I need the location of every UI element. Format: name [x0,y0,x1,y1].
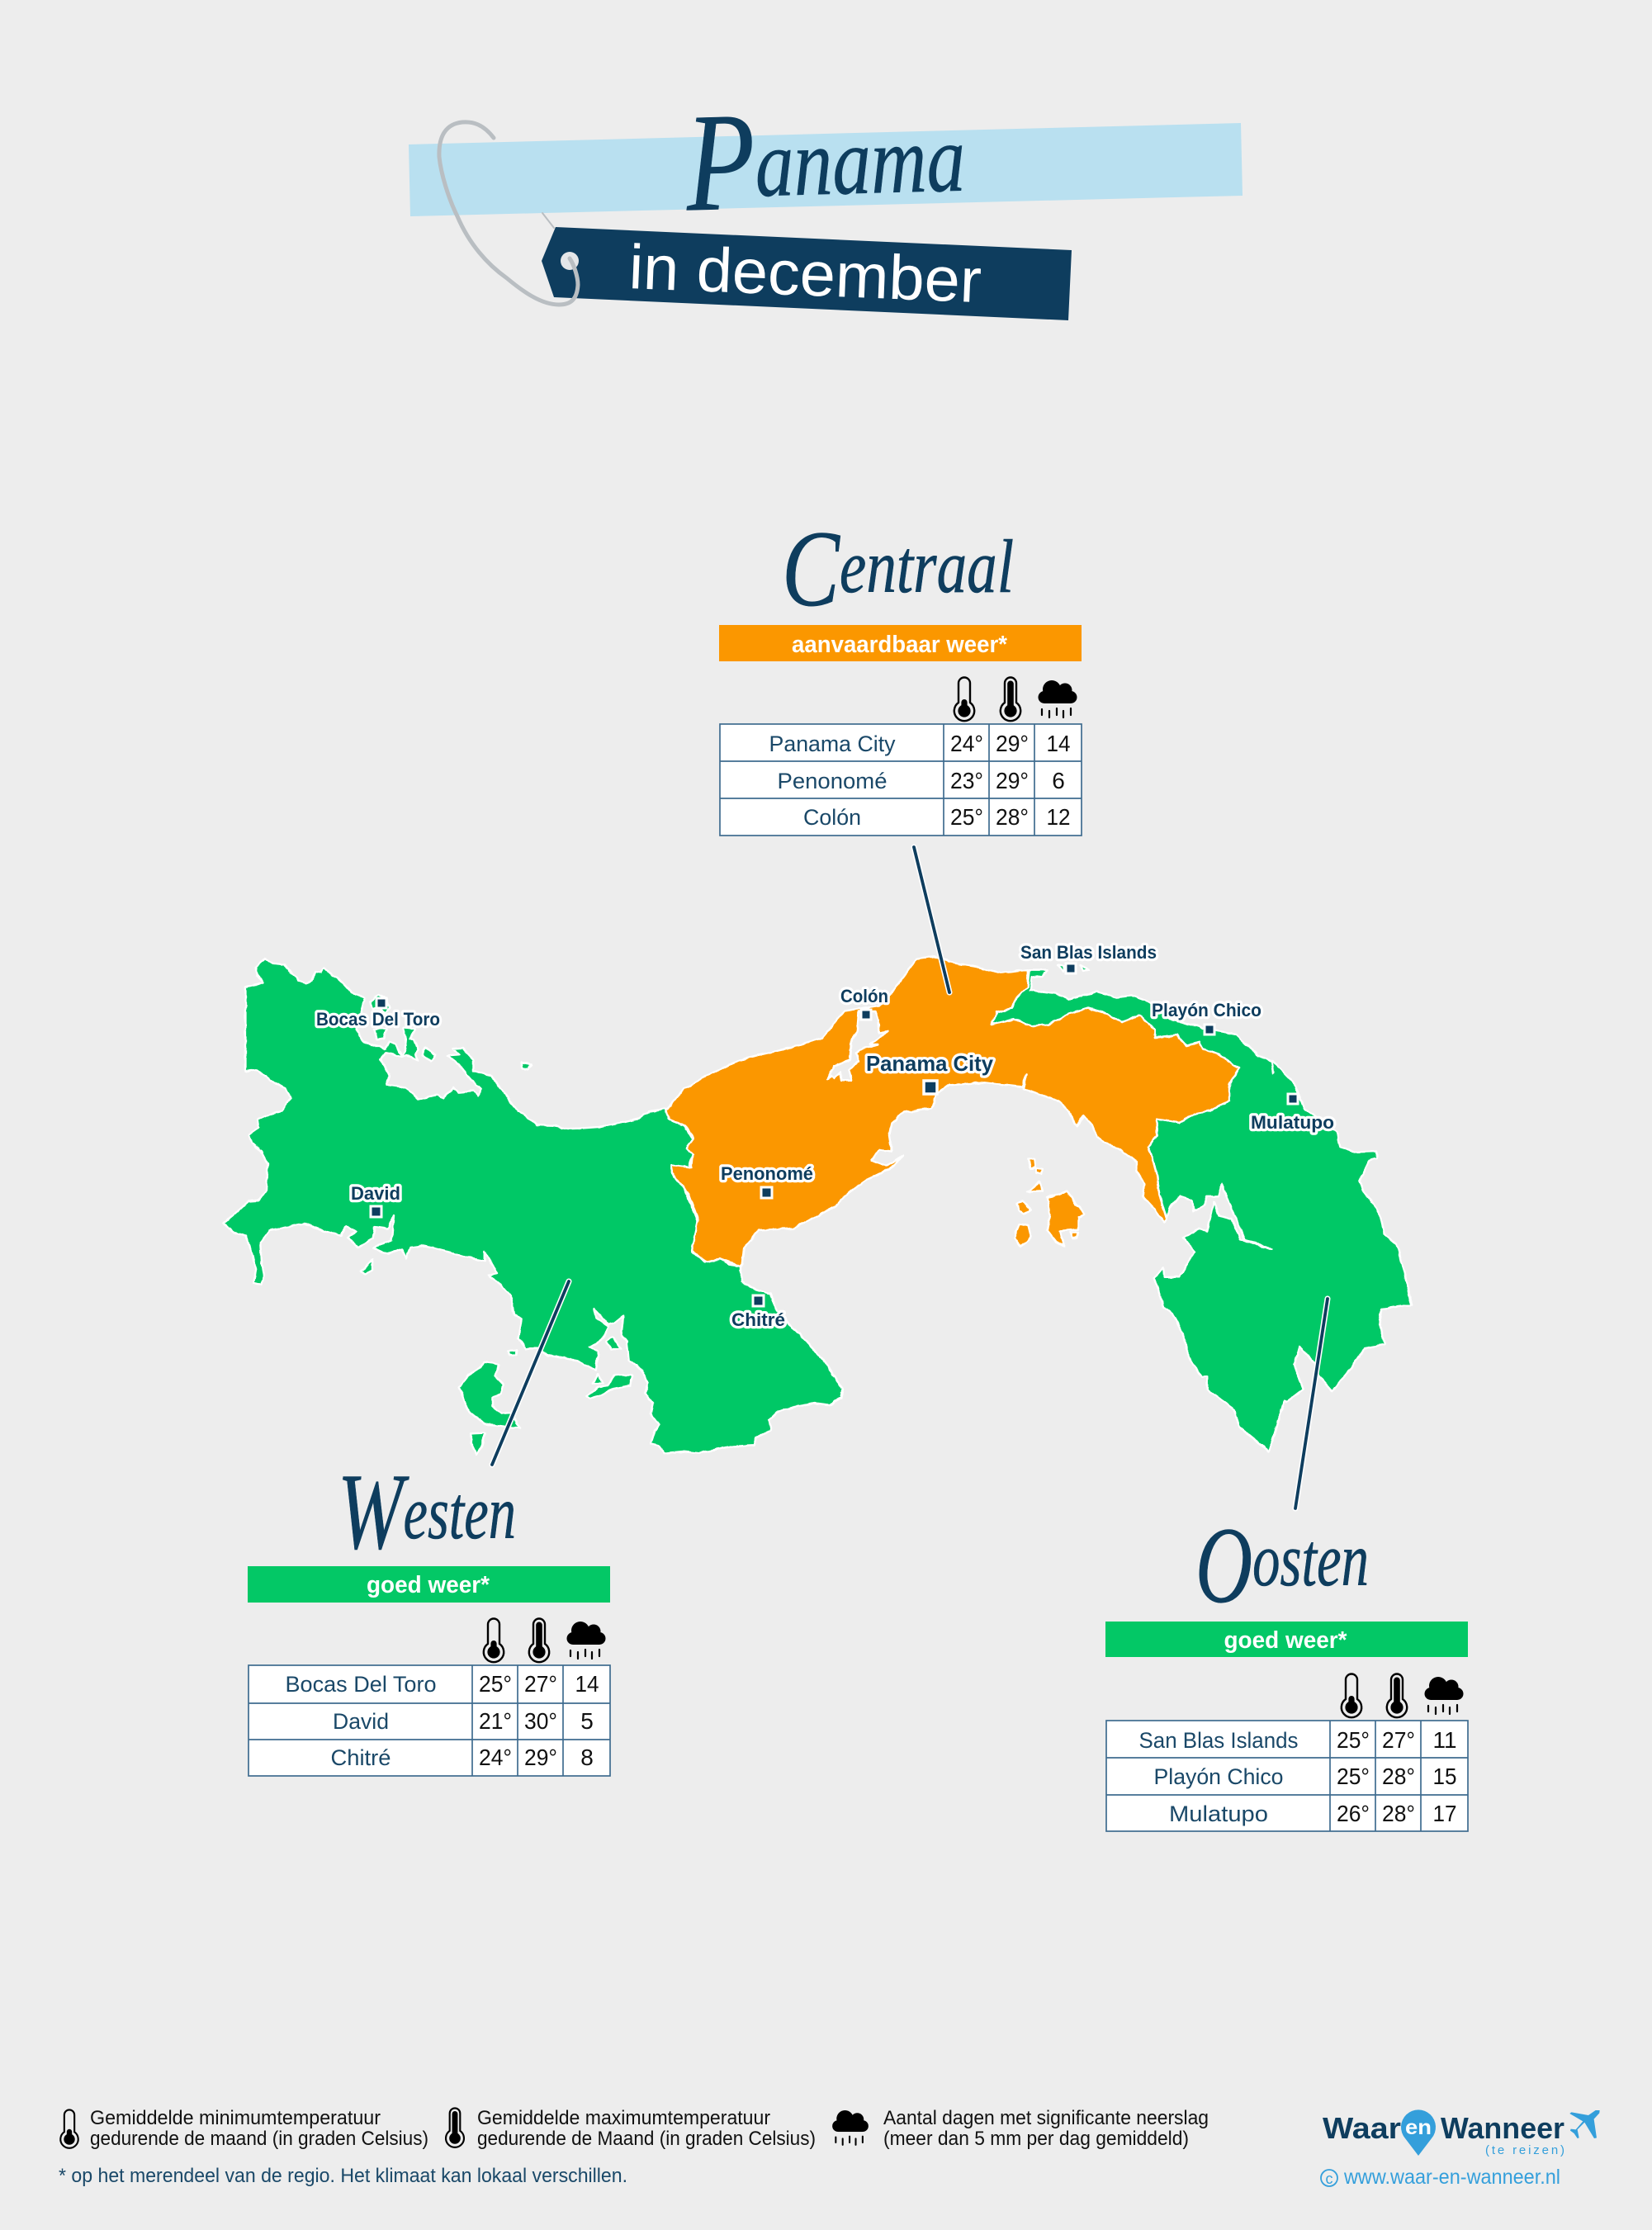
city: Chitré [731,1295,785,1330]
logo pin: en [1405,2116,1432,2139]
heading: Centraal: C [782,508,840,629]
logo wordmark left: Waar [1323,2111,1401,2145]
panel: Oosten [1105,1504,1468,1831]
copyright mark [1321,2170,1337,2187]
logo wordmark right: Wanneer [1441,2111,1564,2145]
table: Oosten cities: 28° [1382,1764,1415,1789]
legend item: precipitation: Aantal dagen met significante neerslag [883,2107,1209,2129]
panel: Centraal [719,508,1082,836]
heading: Westen: W [338,1451,409,1572]
city: Panama City: Panama City [866,1051,994,1076]
table: Oosten cities: 11 [1433,1727,1456,1753]
legend item: maximum temperature [446,2107,816,2150]
legend item: minimum temperature [60,2107,428,2150]
icons: min temp, max temp, rain [954,677,1077,721]
pointer line: Centraal [914,847,949,992]
city: Playón Chico [1152,1000,1261,1035]
table: Oosten cities: 26° [1337,1801,1370,1826]
table: Westen cities: 30° [524,1708,557,1734]
city: Penonomé: Penonomé [721,1163,813,1184]
city: Mulatupo [1251,1094,1334,1133]
table: Centraal cities: 23° [950,768,983,793]
rating bar: goed weer [1105,1622,1468,1657]
table: Centraal cities: 14 [1047,731,1070,756]
table: Oosten cities: 28° [1382,1801,1415,1826]
table: Westen cities: 29° [524,1745,557,1770]
map regions [223,956,1412,1455]
legend [59,2107,1209,2187]
icons: min temp, max temp, rain [1342,1674,1463,1717]
table: Westen cities: 21° [479,1708,512,1734]
city: David [351,1183,400,1217]
table: Centraal cities: Penonomé [778,769,887,793]
table: Westen cities: 27° [524,1671,557,1697]
pointer line: Oosten [1295,1299,1328,1508]
legend item: maximum temperature: gedurende de Maand (in graden Celsius) [477,2128,816,2150]
table: Oosten cities: 27° [1382,1727,1415,1753]
table: Centraal cities: 24° [950,731,983,756]
logo: Waar en Wanneer [1321,2109,1600,2189]
table: Oosten cities: 25° [1337,1764,1370,1789]
copyright mark: c [1326,2171,1332,2187]
title block [409,78,1243,320]
table: Centraal cities: Colón [803,805,861,830]
table: Westen cities: 8 [580,1745,594,1770]
city: Colón: Colón [840,986,888,1006]
tag hole [561,252,579,270]
rating bar: goed weer [248,1566,610,1603]
Gatun lake and canal [827,1011,888,1080]
table: Oosten cities: 17 [1433,1801,1456,1826]
city: Chitré: Chitré [731,1309,785,1330]
subtitle: in december: in december [627,232,982,316]
legend item: precipitation: (meer dan 5 mm per dag gemiddeld) [883,2128,1189,2150]
map of Panama [223,847,1412,1508]
table: Oosten cities: San Blas Islands [1139,1728,1298,1753]
table: Centraal cities: 29° [996,731,1029,756]
heading: Westen: esten [403,1470,516,1555]
title band: light blue [409,123,1243,216]
city: Panama City [866,1051,994,1094]
rating bar: goed weer: goed weer* [1224,1627,1347,1654]
pointer line: Westen [492,1281,569,1465]
legend item: minimum temperature: Gemiddelde minimumtemperatuur [90,2107,381,2129]
city: Mulatupo: Mulatupo [1251,1112,1334,1133]
table: Westen cities: David [333,1709,389,1734]
title: Panama: P [684,83,757,240]
tag string [439,122,578,305]
table: Oosten cities: Playón Chico [1154,1764,1283,1789]
table: Centraal cities: 6 [1052,768,1065,793]
table: Westen cities: 24° [479,1745,512,1770]
city: Colón [840,986,888,1020]
heading: Oosten: osten [1252,1517,1369,1602]
city: Bocas Del Toro: Bocas Del Toro [316,1009,440,1030]
title: Panama: anama [754,107,967,217]
logo pin [1401,2109,1436,2156]
table: Centraal cities: 12 [1047,804,1070,830]
legend item: maximum temperature: Gemiddelde maximumtemperatuur [477,2107,770,2129]
rating bar: aanvaardbaar weer [719,625,1082,661]
table: Westen cities: Bocas Del Toro [286,1672,436,1697]
table: Westen cities: 25° [479,1671,512,1697]
icon: airplane [1569,2110,1600,2138]
table: Oosten cities: Mulatupo [1169,1802,1268,1826]
legend item: minimum temperature: gedurende de maand (in graden Celsius) [90,2128,428,2150]
city: San Blas Islands [1020,942,1157,973]
website url: www.waar-en-wanneer.nl [1343,2166,1560,2189]
table: Centraal cities: 28° [996,804,1029,830]
footnote: * op het merendeel van de regio. Het klimaat kan lokaal verschillen. [59,2165,627,2187]
table: Centraal cities [720,724,1082,836]
table: Oosten cities [1106,1721,1468,1831]
heading: Centraal: entraal [840,524,1014,608]
region: Westen (green) [223,959,843,1455]
city: David: David [351,1183,400,1204]
table: Westen cities [249,1665,610,1776]
rating bar: goed weer: goed weer* [367,1572,490,1598]
city: Bocas Del Toro [316,998,440,1030]
table: Westen cities: 14 [575,1671,599,1697]
table: Centraal cities: Panama City [769,731,896,756]
icons: min temp, max temp, rain [484,1618,606,1662]
table: Westen cities: Chitré [330,1745,391,1770]
logo tagline: (te reizen) [1485,2143,1564,2157]
Bocas del Toro islands [369,995,531,1069]
heading: Oosten: O [1195,1504,1252,1626]
rating bar: aanvaardbaar weer: aanvaardbaar weer* [792,632,1008,658]
legend item: precipitation [832,2107,1209,2150]
table: Westen cities: 5 [580,1708,594,1734]
region: Oosten (green) [992,965,1412,1451]
city: San Blas Islands: San Blas Islands [1020,942,1157,963]
table: Oosten cities: 15 [1433,1764,1456,1789]
table: Centraal cities: 29° [996,768,1029,793]
table: Oosten cities: 25° [1337,1727,1370,1753]
city: Playón Chico: Playón Chico [1152,1000,1261,1020]
panel: Westen [248,1451,610,1776]
city: Penonomé [721,1163,813,1198]
region: Centraal (orange) [666,956,1239,1267]
tag: dark blue [542,227,1072,320]
table: Centraal cities: 25° [950,804,983,830]
